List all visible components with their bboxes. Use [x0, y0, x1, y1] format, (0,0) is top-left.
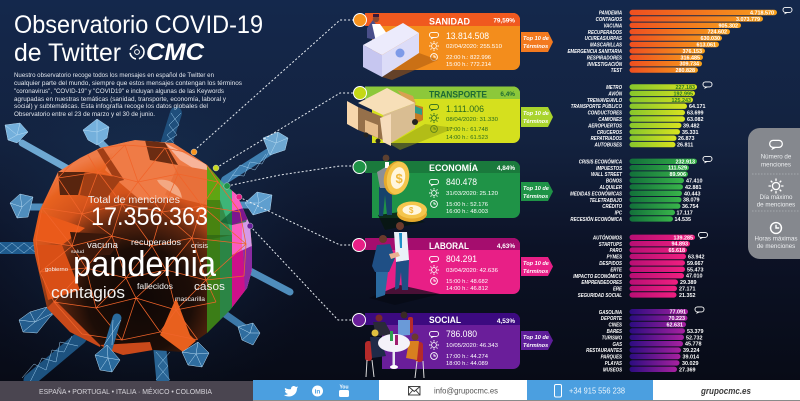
chart: laboral terms: ERE [613, 286, 622, 293]
chart: sanidad terms: INVESTIGACIÓN [587, 60, 622, 68]
stats: 03/04/2020: 42.636 [446, 268, 498, 274]
total mentions: Total de menciones [88, 194, 180, 206]
logo: CMC: CMC [146, 39, 205, 66]
chart: sanidad terms: 613.061 [696, 42, 716, 48]
icon: linkedin: in [315, 388, 320, 396]
chart: transporte terms: CAMIONES [598, 116, 622, 123]
stats [429, 104, 498, 141]
chart: economia terms: MEDIDAS ECONÓMICAS [570, 190, 622, 198]
chart: social terms: 53.379 [687, 329, 704, 335]
stats: 14:00 h.: 46.812 [446, 286, 488, 292]
chart: laboral terms: EMPRENDEDORES [581, 280, 622, 286]
icon: youtube [339, 384, 349, 397]
chart: transporte terms [571, 84, 706, 149]
spike heads [5, 119, 288, 345]
tag: top 10 social [521, 331, 553, 350]
chart: social terms: MUSEOS [603, 367, 622, 374]
chart: social terms: 39.224 [683, 348, 700, 354]
stats: 1.111.006 [446, 104, 484, 114]
phone number: +34 915 556 238 [569, 386, 626, 396]
illustration: reception desk with doctor [363, 14, 438, 80]
legend panel: Día máximo [759, 194, 793, 201]
connector node [354, 14, 366, 26]
chart: social terms: CINES [609, 322, 622, 329]
illustration: handshake [369, 222, 440, 305]
chart: transporte terms: 26.811 [677, 143, 693, 149]
stats: 02/04/2020: 255.510 [446, 44, 502, 50]
word cloud: salud [71, 249, 85, 254]
stats: 15:00 h.: 52.176 [446, 202, 488, 208]
stats: 10/05/2020: 46.343 [446, 343, 498, 349]
chart: transporte terms: 192.995 [674, 91, 693, 97]
chart: social terms: 39.014 [682, 354, 699, 360]
chart: social terms: 62.631 [666, 322, 683, 328]
intro text: cualquier parte del mundo, siempre que estos mensajes contengan los términos [14, 80, 243, 87]
chart: transporte terms: 63.082 [687, 117, 704, 123]
chart: social terms: 52.732 [686, 335, 702, 341]
chart: laboral terms: PARO [610, 248, 622, 254]
word cloud [45, 237, 226, 303]
tag: top 10 economia [521, 182, 553, 201]
chart: sanidad terms: 3.073.779 [736, 17, 760, 23]
dashed connector lines [197, 20, 354, 320]
virus spikes in front of the body [95, 318, 209, 372]
chart: transporte terms: METRO [606, 84, 622, 91]
countries: ESPAÑA • PORTUGAL • ITALIA · MÉXICO • COLOMBIA [39, 387, 212, 396]
chart: sanidad terms: 905.302 [718, 23, 738, 29]
word cloud: mascarilla [175, 297, 206, 303]
chart: transporte terms: CRUCEROS [597, 129, 622, 136]
chart: laboral terms: STARTUPS [599, 241, 622, 248]
stats: 14:00 h.: 61.523 [446, 135, 488, 141]
stats [429, 329, 498, 367]
stats: 840.478 [446, 177, 477, 187]
stats: 08/04/2020: 31.330 [446, 117, 498, 123]
icon: linkedin [312, 386, 323, 396]
stats: 804.291 [446, 254, 477, 264]
chart: laboral terms: PYMES [607, 254, 622, 261]
chart: economia terms: BONOS [606, 178, 622, 185]
tag: top 10 social: Top 10 de [523, 335, 549, 341]
chart: economia terms: ALQUILER [599, 184, 622, 191]
chart: sanidad terms: RECUPERADOS [588, 29, 622, 36]
chart: sanidad terms: RESPIRADORES [587, 55, 622, 62]
virus connector dots [191, 149, 253, 229]
stats [429, 177, 498, 215]
chart: social terms: 45.778 [685, 342, 702, 348]
facets [105, 140, 210, 200]
chart: laboral terms: 27.171 [679, 286, 696, 292]
chart: laboral terms: 47.010 [686, 274, 702, 280]
chart: economia terms: IPC [615, 210, 622, 217]
panel: laboral [352, 222, 520, 305]
share: 6,4% [500, 91, 515, 98]
chart: economia terms: CRISIS ECONÓMICA [579, 158, 622, 166]
chart: laboral terms: 59.667 [687, 261, 704, 267]
chart: social terms: 30.029 [682, 361, 698, 367]
word cloud: contagios [51, 283, 125, 302]
illustration: man with coins [377, 155, 427, 230]
tag: top 10 laboral [521, 257, 553, 276]
chart: economia terms: TELETRABAJO [589, 197, 622, 204]
legend panel: menciones [761, 162, 791, 168]
tag: top 10 sanidad [521, 32, 553, 52]
chart: social terms: GAS [612, 341, 622, 348]
total mentions: 17.356.363 [91, 203, 208, 231]
chart: economia terms: 36.754 [682, 204, 698, 210]
stats: 15:00 h.: 772.214 [446, 62, 491, 68]
tag: top 10 laboral: Top 10 de [523, 261, 549, 267]
chart: social terms: GASOLINA [599, 309, 622, 316]
footer [0, 380, 800, 401]
chart: laboral terms: 21.352 [679, 293, 696, 299]
chart: social terms: 27.369 [679, 367, 696, 373]
chart: social terms [586, 309, 704, 374]
share: 4,84% [497, 165, 515, 172]
chart: social terms: PARQUES [601, 354, 622, 361]
chart: laboral terms: ERTE [610, 267, 622, 274]
chart: laboral terms: 63.942 [688, 254, 704, 260]
chart: sanidad terms: TEST [611, 68, 623, 74]
tag: top 10 sanidad: Términos [523, 44, 548, 50]
chart: economia terms: RECESIÓN ECONÓMICA [570, 215, 622, 223]
icon: envelope [408, 386, 420, 395]
heading: LABORAL [429, 241, 469, 252]
illustration: delivery truck [347, 88, 455, 150]
tag: top 10 social: Términos [523, 343, 548, 349]
chart: economia terms: 232.913 [676, 159, 695, 165]
icons: chart mention bubbles [695, 7, 792, 313]
chart: laboral terms: 65.618 [668, 248, 685, 254]
tag: top 10 laboral: Términos [523, 269, 548, 275]
chart: social terms: RESTAURANTES [586, 348, 622, 354]
chart: transporte terms: 64.171 [689, 104, 706, 110]
chart: laboral terms [573, 234, 704, 299]
chart: economia terms: 89.906 [670, 172, 686, 178]
chart: laboral terms: SEGURIDAD SOCIAL [578, 292, 622, 299]
stats: 17:00 h.: 61.748 [446, 127, 488, 133]
stats: 786.080 [446, 329, 477, 339]
connector node [352, 238, 366, 252]
word cloud: pandemia [73, 243, 217, 284]
chart: social terms: DEPORTE [601, 316, 622, 322]
chart: transporte terms: 227.183 [676, 85, 695, 91]
chart: sanidad terms: EMERGENCIA SANITARIA [568, 48, 622, 55]
chart: sanidad terms: 309.734 [680, 62, 699, 68]
heading: ECONOMÍA [429, 163, 478, 174]
chart: social terms: PLAYAS [605, 360, 622, 367]
illustration: man with coins: $ [409, 206, 414, 215]
chart: laboral terms: 139.285 [674, 235, 693, 241]
share: 4,53% [497, 318, 515, 325]
chart: sanidad terms: 376.153 [682, 49, 702, 55]
chart: transporte terms: 39.482 [683, 123, 700, 129]
chart: laboral terms: AUTÓNOMOS [592, 234, 622, 242]
word cloud: vacuna [87, 240, 119, 251]
connector node [354, 86, 366, 100]
website: grupocmc.es [700, 386, 751, 397]
chart: transporte terms: TRANSPORTE PÚBLICO [571, 103, 622, 110]
chart: sanidad terms: 724.602 [708, 30, 727, 36]
word cloud: recuperados [131, 237, 181, 247]
mesh [36, 145, 246, 340]
stats: 18:00 h.: 44.089 [446, 361, 488, 367]
chart: economia terms: 47.410 [686, 178, 702, 184]
stats: 15:00 h.: 48.682 [446, 279, 488, 285]
icon: youtube: You [339, 384, 349, 390]
chart: laboral terms: 94.893 [672, 242, 688, 248]
connector node [352, 314, 366, 326]
tag: top 10 sanidad: Top 10 de [523, 36, 549, 42]
chart: laboral terms: DESPIDOS [599, 260, 622, 267]
legend panel: de menciones [757, 202, 795, 208]
share: 79,59% [493, 18, 515, 24]
chart: economia terms: 42.881 [685, 185, 702, 191]
word cloud: casos [194, 281, 226, 293]
background glow behind virus [0, 100, 340, 381]
chart: transporte terms: AVIÓN [608, 90, 622, 98]
title: de Twitter [14, 39, 121, 67]
illustration: group at a table [365, 312, 424, 378]
chart: economia terms: IMPUESTOS [596, 165, 622, 172]
stats: 31/03/2020: 25.120 [446, 191, 498, 197]
virus spikes behind the body [0, 113, 290, 382]
chart: transporte terms: 26.873 [678, 136, 694, 142]
chart: economia terms: 40.443 [684, 191, 700, 197]
chart: transporte terms: REPATRIADOS [591, 136, 622, 142]
chart: sanidad terms: PANDEMIA [599, 10, 622, 17]
chart: transporte terms: AEROPUERTOS [587, 123, 622, 130]
title [14, 11, 263, 67]
legend panel [748, 128, 800, 259]
chart: laboral terms: 55.473 [687, 267, 704, 273]
title: Observatorio COVID-19 [14, 11, 263, 39]
chart: economia terms: WALL STREET [591, 172, 623, 178]
panel: social [352, 312, 520, 378]
icon: phone [554, 384, 562, 397]
chart: sanidad terms: UCI/REAS/URPAS [585, 36, 622, 42]
intro text: Nuestro observatorio recoge todos los mensajes en español de Twitter en [14, 72, 214, 79]
heading: TRANSPORTE [429, 90, 487, 100]
chart: social terms: BARES [607, 328, 622, 335]
stats [429, 254, 498, 292]
email: info@grupocmc.es [434, 386, 498, 396]
intro text: social) y subtemáticas. Esta infografía recoge los datos globales del [14, 103, 208, 110]
chart: economia terms [570, 158, 702, 223]
intro text [14, 72, 243, 118]
panel: sanidad [354, 13, 520, 80]
share: 4,63% [497, 243, 515, 250]
icon: twitter [284, 386, 298, 396]
chart: transporte terms: 125.243 [672, 98, 691, 104]
word cloud: crisis [191, 243, 209, 250]
virus body [33, 140, 254, 357]
tag: top 10 transporte: Términos [523, 119, 548, 125]
tag: top 10 economia: Términos [523, 194, 548, 200]
heading: SANIDAD [429, 16, 470, 28]
word cloud: gobierno [45, 267, 68, 273]
chart: social terms: 77.091 [670, 310, 686, 316]
chart: social terms: TURISMO [602, 335, 622, 342]
legend panel: Número de [761, 154, 792, 160]
tag: top 10 transporte: Top 10 de [523, 111, 549, 117]
chart: transporte terms: 35.331 [682, 130, 698, 136]
chart: laboral terms: IMPACTO ECONÓMICO [573, 272, 622, 280]
chart: transporte terms: CONDUCTORES [588, 110, 622, 117]
illustration: man with coins: $ [396, 171, 404, 186]
chart: sanidad terms: 630.030 [700, 36, 720, 42]
chart: sanidad terms: 316.485 [680, 55, 700, 61]
chart: sanidad terms: 280.828 [676, 68, 695, 74]
chart: economia terms: 38.079 [683, 198, 700, 204]
chart: economia terms: 111.529 [668, 166, 687, 172]
stats [429, 31, 502, 68]
chart: economia terms: 17.117 [676, 210, 693, 216]
chart: sanidad terms [568, 10, 777, 74]
stats: 16:00 h.: 48.003 [446, 209, 488, 215]
chart: economia terms: 14.535 [674, 217, 691, 223]
tag: top 10 transporte [521, 107, 553, 127]
chart: sanidad terms: VACUNA [604, 23, 622, 30]
connector node [353, 160, 366, 174]
stats: 17:00 h.: 44.274 [446, 354, 488, 360]
chart: economia terms: CRÉDITO [602, 201, 622, 210]
stats: 22:00 h.: 822.996 [446, 55, 491, 61]
legend panel: de menciones [757, 243, 795, 250]
tag: top 10 economia: Top 10 de [523, 186, 549, 192]
chart: social terms: 70.223 [668, 316, 685, 322]
intro text: Observatorio entre el 23 de marzo y el 30 de junio. [14, 111, 155, 118]
chart: sanidad terms: 4.718.570 [750, 10, 774, 16]
panel: transporte [347, 86, 520, 150]
chart: sanidad terms: MASCARILLAS [590, 42, 622, 49]
legend panel: Horas máximas [755, 236, 797, 242]
heading: SOCIAL [429, 315, 461, 326]
panel: economia [353, 155, 520, 230]
stats: 13.814.508 [446, 31, 489, 41]
intro text: agrupadas en nuestras temáticas (sanidad, transporte, economía, laboral y [14, 96, 227, 103]
chart: laboral terms: 29.389 [680, 280, 696, 286]
chart: sanidad terms: CONTAGIOS [596, 16, 622, 23]
chart: transporte terms: AUTOBUSES [594, 142, 622, 149]
colored sector stripes [207, 165, 220, 333]
word cloud: fallecidos [137, 282, 173, 291]
intro text: "coronavirus", "COVID-19" y "COVID19" e incluyan algunas de las Keywords [14, 88, 225, 95]
chart: transporte terms: TREN/AVE/AVLO [587, 97, 622, 104]
chart: transporte terms: 63.699 [687, 111, 704, 117]
